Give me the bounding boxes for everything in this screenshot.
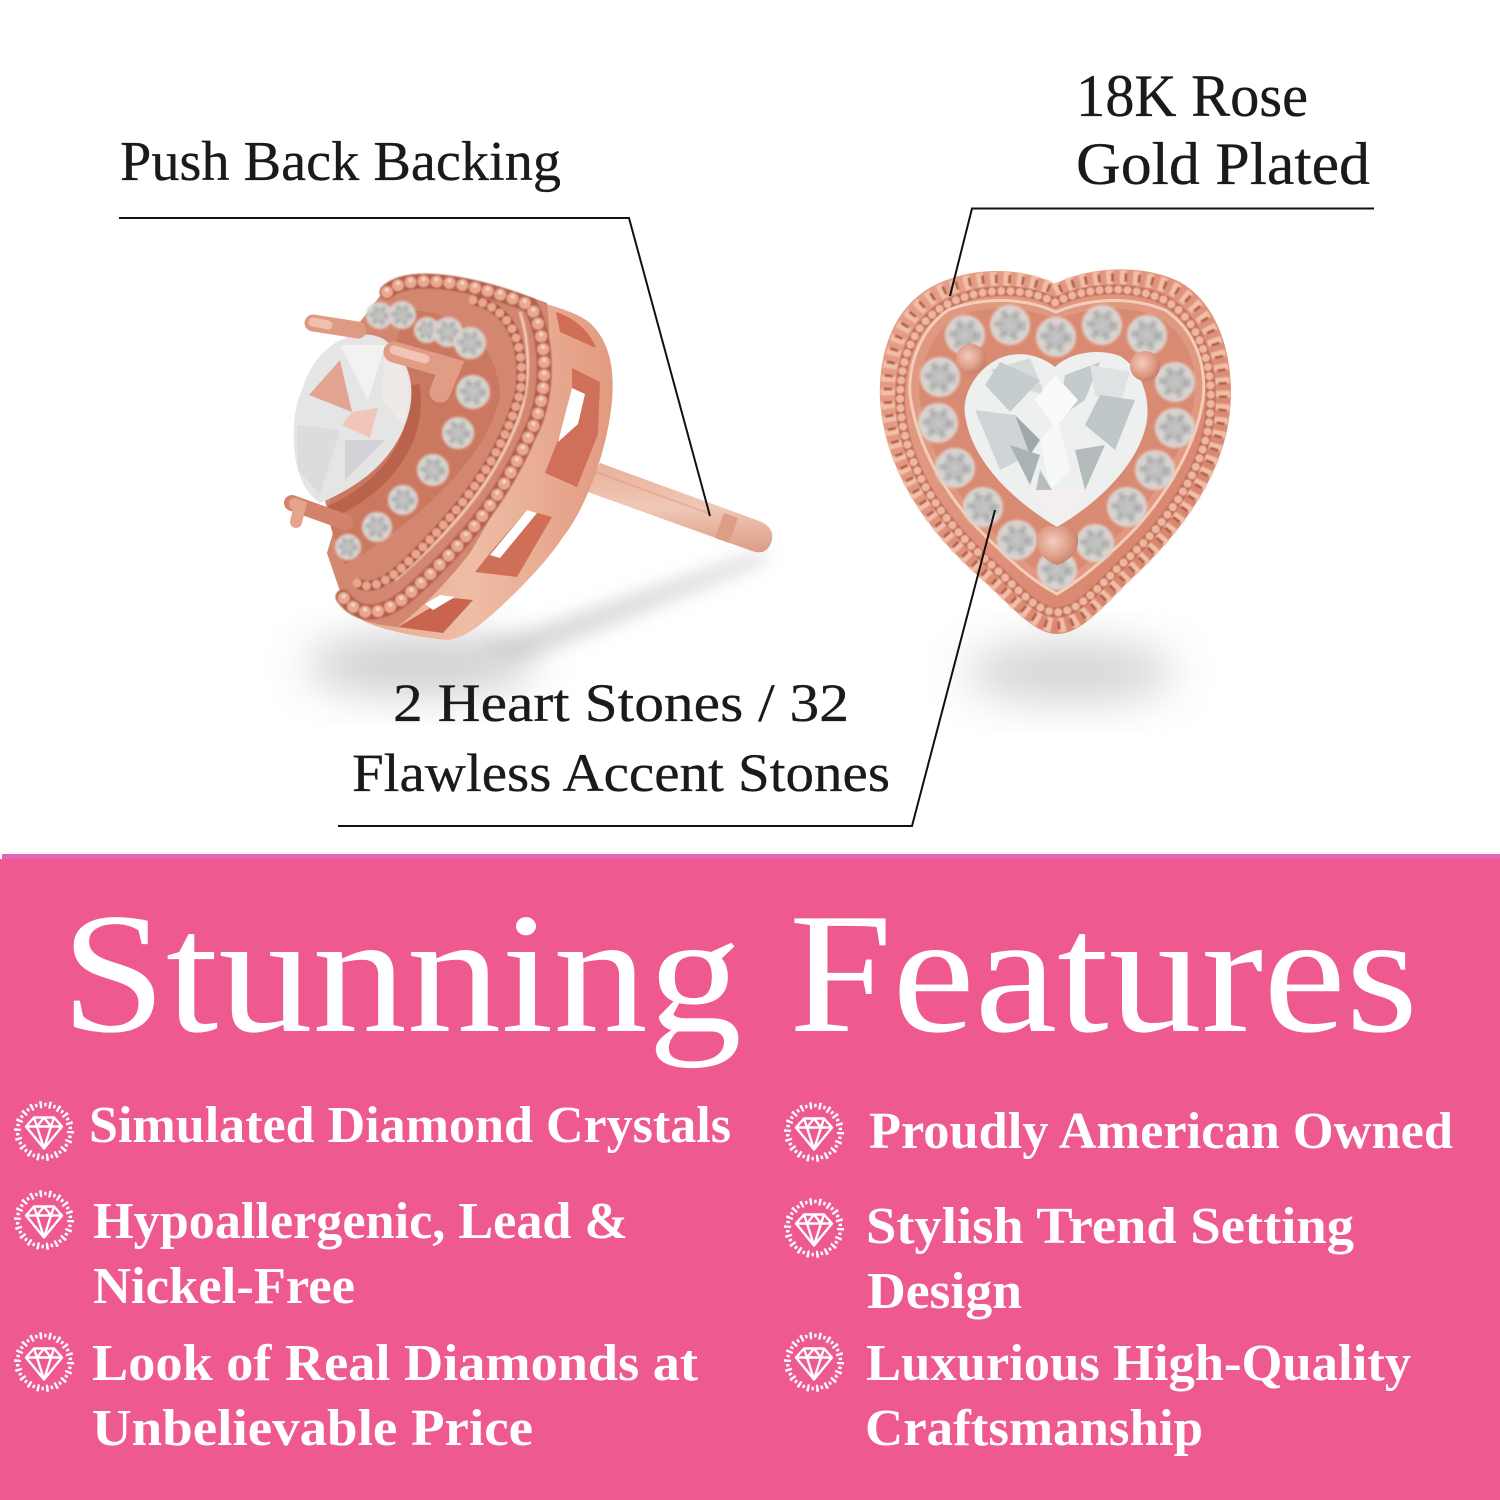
accent stones	[335, 301, 490, 560]
feature: hypoallergenic: Hypoallergenic, Lead &	[93, 1193, 628, 1250]
icon: diamond	[18, 1194, 70, 1246]
leader line	[950, 208, 1374, 296]
callout: push back backing	[119, 131, 710, 516]
icon: diamond	[18, 1104, 70, 1158]
label text: 2 Heart Stones / 32	[393, 673, 849, 733]
icon: diamond	[788, 1202, 840, 1254]
shadow under side earring	[305, 552, 770, 695]
ridge line	[395, 312, 528, 580]
feature: stylish design: Stylish Trend Setting	[866, 1198, 1354, 1255]
accent stones	[918, 306, 1194, 590]
panel: features	[0, 854, 1500, 1500]
feature: stylish design	[788, 1198, 1354, 1320]
earring post	[585, 463, 772, 552]
white background	[0, 0, 1500, 856]
outer rope rim	[888, 277, 1223, 625]
band windows	[398, 312, 600, 633]
icon: diamond	[788, 1336, 840, 1388]
label text: Push Back Backing	[120, 131, 561, 193]
beaded inner rim	[357, 300, 522, 586]
leader line	[338, 510, 995, 826]
feature: luxurious craftsmanship: Craftsmanship	[865, 1400, 1203, 1457]
product photo: front view earring	[880, 269, 1231, 702]
main side stone	[294, 334, 411, 503]
side band of setting	[327, 276, 613, 640]
feature: look of real diamonds: Unbelievable Price	[92, 1400, 533, 1457]
stone seat ring	[330, 385, 414, 512]
inner plate	[910, 300, 1204, 594]
beaded outer rim	[343, 281, 544, 612]
product photo: side view earring	[292, 276, 772, 695]
callout: rose gold	[950, 63, 1374, 296]
prongs	[956, 344, 1160, 565]
title	[61, 879, 1418, 1069]
feature: hypoallergenic	[18, 1193, 628, 1315]
icon: diamond	[18, 1336, 70, 1388]
icon: diamond	[788, 1106, 840, 1158]
title: Stunning	[61, 879, 742, 1069]
feature: look of real diamonds	[18, 1335, 699, 1457]
main heart stone	[965, 352, 1148, 527]
shadow under front earring	[965, 642, 1175, 702]
label text second line: Flawless Accent Stones	[352, 743, 890, 803]
feature: luxurious craftsmanship: Luxurious High-Quality	[866, 1335, 1411, 1392]
feature: hypoallergenic: Nickel-Free	[93, 1258, 355, 1315]
feature: stylish design: Design	[867, 1263, 1022, 1320]
inner copper seat	[329, 310, 500, 565]
second rope rim	[900, 290, 1211, 612]
feature: luxurious craftsmanship	[788, 1335, 1411, 1457]
feature: simulated diamond crystals: Simulated Diamond Crystals	[89, 1097, 731, 1154]
title: Features	[789, 879, 1418, 1069]
heart base	[880, 269, 1231, 634]
label text: 18K Rose	[1076, 63, 1308, 129]
feature: proudly american owned: Proudly American Owned	[869, 1103, 1453, 1160]
front rim of setting	[300, 278, 549, 627]
feature: look of real diamonds: Look of Real Diamonds at	[92, 1335, 699, 1392]
prongs	[292, 322, 450, 522]
callout: stones	[338, 510, 995, 826]
leader line	[119, 218, 710, 516]
label text second line: Gold Plated	[1076, 131, 1370, 197]
